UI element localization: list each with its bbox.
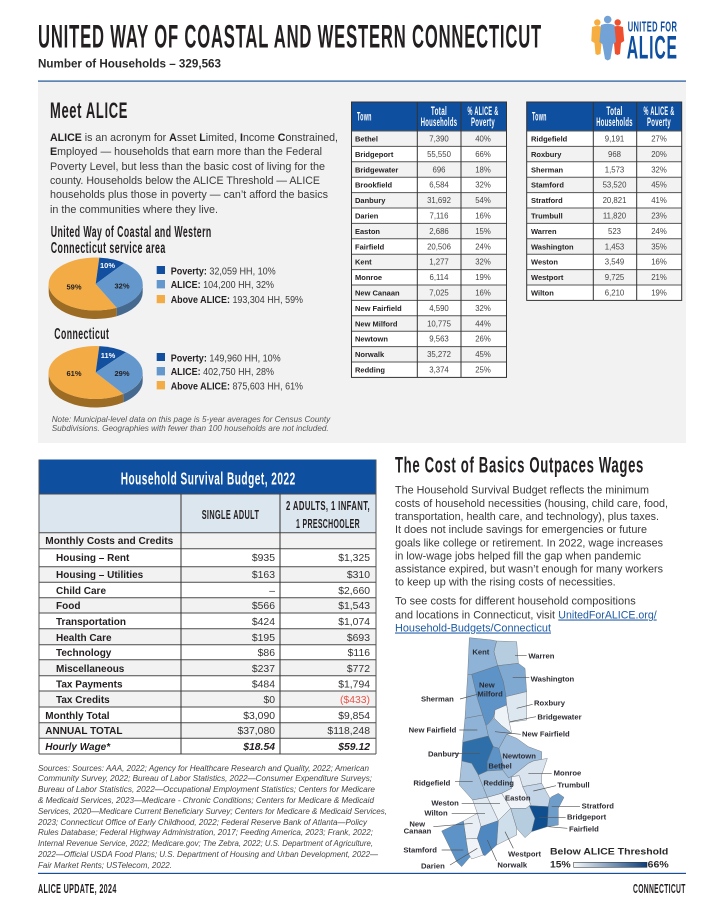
- table: towns R to W: 41%: [651, 196, 667, 205]
- table: towns R to W: Ridgefield: [531, 134, 568, 144]
- pie chart: service area: 10%: [100, 261, 115, 270]
- map legend: Below ALICE Threshold: Below ALICE Threshold: [550, 847, 669, 857]
- town labels: Roxbury: [534, 699, 566, 708]
- budget title bar: Household Survival Budget, 2022: [121, 468, 296, 488]
- text block: link to budgets: To see costs for different household compositions: [395, 596, 636, 608]
- legend: Connecticut: Poverty: 149,960 HH, 10%: [171, 354, 281, 365]
- table: towns R to W: Trumbull: [531, 212, 563, 220]
- table: Household Survival Budget: Tax Payments: [56, 680, 123, 690]
- text block: Household Survival Budget description: in low-wage jobs helped fill the gap when pandemic: [395, 550, 642, 562]
- table: towns A to R: Danbury: [355, 196, 386, 205]
- table: towns A to R: 19%: [475, 273, 491, 282]
- table header: [527, 102, 682, 131]
- town labels: Norwalk: [497, 861, 528, 870]
- table: towns A to R: Bridgeport: [355, 150, 394, 159]
- table: towns R to W: Wilton: [531, 288, 554, 298]
- table: Household Survival Budget: $1,074: [338, 617, 370, 628]
- table: towns A to R: Darien: [355, 212, 379, 220]
- town labels: Weston: [431, 798, 459, 807]
- logo: United for ALICE: [591, 16, 678, 65]
- pie chart: Connecticut: 11%: [101, 351, 116, 360]
- text block: Household Survival Budget description: assistance expired, but wasn’t enough for many workers: [395, 564, 663, 576]
- leader lines: [433, 656, 580, 865]
- table: towns R to W: 45%: [651, 181, 667, 190]
- table: towns R to W: 9,191: [605, 134, 624, 144]
- table: towns A to R: 1,277: [429, 258, 449, 267]
- table: towns R to W: 11,820: [603, 212, 627, 220]
- logo: United for ALICE: UNITED FOR: [628, 20, 677, 36]
- sources: Fair Market Rents; USTelecom, 2022.: [38, 860, 172, 870]
- table: Household Survival Budget: –: [269, 586, 275, 597]
- table: towns A to R: 4,590: [429, 304, 449, 313]
- text block: link to budgets: [395, 596, 657, 634]
- table: Household Survival Budget: Housing – Rent: [56, 553, 130, 564]
- pie chart: service area: 32%: [114, 282, 130, 290]
- legend: Connecticut: Above ALICE: 875,603 HH, 61%: [171, 382, 303, 392]
- note: Subdivisions. Geographies with fewer than 100 households are not included.: [52, 424, 329, 433]
- table: Household Survival Budget: $3,090: [243, 711, 275, 722]
- table: towns A to R: 40%: [475, 134, 491, 144]
- town labels: Kent: [472, 647, 490, 656]
- map: towns shaded by share below ALICE Threshold: [403, 638, 669, 870]
- table: towns A to R: 9,563: [429, 335, 449, 344]
- town labels: Washington: [531, 675, 575, 684]
- table: Household Survival Budget: $9,854: [338, 711, 370, 722]
- table: towns A to R: 18%: [475, 165, 491, 174]
- table: Household Survival Budget: $935: [252, 553, 275, 564]
- pie chart: Connecticut: [49, 346, 143, 407]
- town labels: Wilton: [424, 808, 448, 817]
- table: towns A to R: 44%: [475, 319, 491, 328]
- table: towns A to R: 7,116: [430, 212, 448, 220]
- table: Household Survival Budget: $693: [347, 633, 370, 644]
- text block: ALICE definition: ALICE is an acronym for Asset Limited, Income Constrained,: [50, 132, 338, 144]
- table: towns A to R: 10,775: [427, 319, 452, 328]
- table: Household Survival Budget: $1,794: [338, 680, 370, 690]
- note: [52, 415, 331, 433]
- table: Household Survival Budget: ANNUAL TOTAL: [45, 726, 123, 737]
- text block: link to budgets: and locations in Connecticut, visit: [395, 610, 555, 622]
- town labels: Fairfield: [569, 824, 599, 833]
- note: Note: Municipal-level data on this page is 5-year averages for Census County: [52, 415, 331, 424]
- panel: Meet ALICE background: [38, 80, 686, 443]
- town labels: New Fairfield: [522, 729, 570, 738]
- table: towns A to R: 55,550: [427, 150, 452, 159]
- town labels: Westport: [508, 849, 541, 858]
- table: towns R to W: 20,821: [603, 196, 626, 205]
- town labels: Danbury: [428, 750, 460, 759]
- table: towns R to W: 1,453: [605, 242, 624, 251]
- table header: Total: [606, 104, 623, 118]
- town shapes: [442, 638, 564, 867]
- legend: Connecticut: [157, 353, 303, 392]
- table: towns A to R: Norwalk: [355, 350, 385, 359]
- table: Household Survival Budget: $566: [252, 601, 275, 612]
- map legend: Below ALICE Threshold: 66%: [648, 860, 669, 870]
- budget column headers: SINGLE ADULT: [202, 507, 259, 522]
- table header: Poverty: [647, 115, 671, 129]
- table: towns A to R: New Canaan: [355, 288, 400, 298]
- table: towns A to R: 6,584: [429, 181, 449, 190]
- town labels: Stamford: [403, 845, 437, 854]
- table: towns R to W: Stratford: [531, 196, 563, 205]
- table: Household Survival Budget: Child Care: [56, 586, 106, 597]
- table: towns A to R: 31,692: [427, 196, 451, 205]
- table: towns A to R: [352, 102, 506, 377]
- footer: ALICE Update: ALICE UPDATE, 2024: [38, 881, 117, 896]
- table: towns R to W: 20%: [651, 150, 667, 159]
- table: Household Survival Budget: Monthly Costs and Credits: [45, 536, 174, 547]
- sources: Bureau of Labor Statistics, 2022—Occupational Employment Statistics; Centers for Medicare: [38, 784, 375, 794]
- table: Household Survival Budget: $163: [252, 570, 275, 581]
- text block: Household Survival Budget description: [395, 484, 668, 588]
- text block: ALICE definition: [50, 132, 338, 216]
- subtitle: number of households: Number of Households – 329,563: [38, 58, 221, 70]
- table: towns R to W: Weston: [531, 258, 558, 267]
- table: Household Survival Budget: $116: [348, 648, 370, 659]
- sources: Internal Revenue Service, 2022; Medicare.gov; The Zebra, 2022; U.S. Department of Agriculture,: [38, 838, 373, 848]
- table: towns R to W: 24%: [651, 227, 667, 236]
- table header: Households: [421, 115, 457, 129]
- table: Household Survival Budget: Miscellaneous: [56, 664, 125, 675]
- table: Household Survival Budget: Tax Credits: [56, 695, 110, 706]
- table: towns R to W: 19%: [651, 288, 667, 298]
- text block: link to budgets: Household-Budgets/Connecticut: [395, 622, 551, 634]
- table: towns R to W: [527, 102, 682, 300]
- table: Household Survival Budget: $0: [263, 695, 275, 706]
- table: Household Survival Budget: [39, 460, 376, 754]
- table: towns A to R: Newtown: [355, 335, 388, 344]
- table: towns A to R: New Milford: [355, 319, 398, 328]
- text block: Household Survival Budget description: The Household Survival Budget reflects the minimum: [395, 484, 649, 496]
- table: towns R to W: 9,725: [605, 273, 625, 282]
- text block: link to budgets: UnitedForALICE.org/: [558, 610, 657, 622]
- table: towns A to R: 25%: [475, 366, 491, 374]
- budget column headers: 2 ADULTS, 1 INFANT,: [286, 498, 370, 513]
- table: Household Survival Budget: Housing – Utilities: [56, 570, 144, 581]
- table: towns A to R: 2,686: [429, 227, 449, 236]
- town labels: Ridgefield: [413, 778, 451, 787]
- table: towns R to W: 6,210: [605, 288, 625, 298]
- budget column headers: 1 PRESCHOOLER: [296, 516, 360, 531]
- table: towns A to R: 16%: [475, 212, 491, 220]
- table: towns R to W: 32%: [651, 165, 667, 174]
- table: Household Survival Budget: $37,080: [237, 726, 275, 737]
- legend: service area: Poverty: 32,059 HH, 10%: [171, 266, 276, 277]
- table: towns A to R: 45%: [475, 350, 491, 359]
- map legend: Below ALICE Threshold: [550, 847, 669, 870]
- town labels: Darien: [421, 861, 445, 870]
- table: towns R to W: 21%: [651, 273, 667, 282]
- table: towns R to W: Roxbury: [531, 150, 562, 159]
- table header: Poverty: [471, 115, 495, 129]
- table: Household Survival Budget: ($433): [340, 695, 370, 706]
- table: towns A to R: 24%: [475, 242, 491, 251]
- table header: Town: [357, 110, 372, 124]
- table: towns R to W: 35%: [651, 242, 667, 251]
- table: towns R to W: Sherman: [531, 165, 564, 174]
- sources: Community Survey, 2022; Bureau of Labor Statistics, 2022—Consumer Expenditure Surveys;: [38, 773, 373, 783]
- heading: service area: [51, 224, 212, 257]
- text block: Household Survival Budget description: to keep up with the rising costs of necessities.: [395, 576, 616, 588]
- legend: service area: Above ALICE: 193,304 HH, 59%: [171, 295, 303, 306]
- table: towns R to W: 3,549: [605, 258, 624, 267]
- town labels: Warren: [528, 651, 555, 660]
- table: towns R to W: 23%: [651, 212, 667, 220]
- town labels: New: [409, 820, 425, 829]
- heading: service area: Connecticut service area: [51, 240, 166, 257]
- table: Household Survival Budget: $86: [258, 648, 275, 659]
- sources: Rules Database; Federal Highway Administration, 2017; Feeding America, 2023; Frank, 2022;: [38, 827, 374, 837]
- table: towns R to W: 27%: [651, 134, 667, 144]
- sources: [37, 763, 387, 870]
- table: towns A to R: Redding: [355, 366, 385, 374]
- text block: Household Survival Budget description: goals like college or retirement. In 2022, wage increases: [395, 538, 663, 550]
- town labels: Stratford: [582, 801, 614, 810]
- table: towns A to R: 26%: [475, 335, 491, 344]
- table: towns A to R: 20,506: [427, 242, 451, 251]
- table: Household Survival Budget: $424: [252, 617, 275, 628]
- text block: ALICE definition: in the communities where they live.: [50, 204, 218, 216]
- table: Household Survival Budget: $484: [252, 680, 275, 690]
- table: Household Survival Budget: $195: [252, 633, 275, 644]
- table: Household Survival Budget: $237: [252, 664, 275, 675]
- pie chart: Connecticut: 29%: [114, 369, 130, 378]
- town labels: Easton: [505, 793, 531, 802]
- town labels: Bridgewater: [537, 713, 582, 722]
- town labels: Canaan: [404, 826, 432, 835]
- text block: ALICE definition: households plus those in poverty — can’t afford the basics: [50, 189, 328, 201]
- town labels: Bethel: [488, 761, 512, 770]
- table: towns A to R: 3,374: [429, 366, 449, 374]
- legend: service area: [157, 266, 303, 306]
- sources: 2022—Official USDA Food Plans; U.S. Department of Housing and Urban Development, 2022—: [37, 849, 378, 859]
- table header: % ALICE &: [468, 104, 498, 118]
- table header: % ALICE &: [644, 104, 674, 118]
- town labels: Redding: [483, 778, 514, 787]
- table: Household Survival Budget: $1,543: [338, 601, 370, 612]
- town labels: Newtown: [502, 751, 536, 760]
- table: Household Survival Budget: Technology: [56, 648, 112, 659]
- table: towns A to R: 15%: [475, 227, 491, 236]
- legend: service area: ALICE: 104,200 HH, 32%: [171, 280, 274, 291]
- table: towns A to R: Easton: [355, 227, 380, 236]
- table: towns A to R: 6,114: [430, 273, 449, 282]
- footer rule: [38, 873, 686, 874]
- town labels: Trumbull: [557, 780, 590, 789]
- table: Household Survival Budget: Food: [56, 601, 80, 612]
- pie chart: Connecticut: 61%: [66, 369, 82, 378]
- pie chart: service area: [49, 258, 143, 319]
- pie chart: service area: 59%: [66, 282, 82, 292]
- table: towns R to W: 1,573: [605, 165, 624, 174]
- table header: [352, 102, 506, 131]
- table header: Town: [532, 110, 547, 124]
- town labels: Milford: [477, 690, 503, 699]
- table: Household Survival Budget: $1,325: [338, 553, 370, 564]
- table: towns A to R: Brookfield: [355, 181, 393, 190]
- table: Household Survival Budget: $59.12: [337, 742, 370, 753]
- text block: Household Survival Budget description: It does not include savings for emergencies or future: [395, 524, 647, 536]
- heading: service area: United Way of Coastal and Western: [51, 224, 212, 241]
- map legend: Below ALICE Threshold: 15%: [550, 860, 571, 870]
- table: towns R to W: Stamford: [531, 181, 564, 190]
- table: towns A to R: 32%: [475, 258, 491, 267]
- town labels: Bridgeport: [567, 813, 607, 822]
- table: towns A to R: New Fairfield: [355, 304, 402, 313]
- table: towns A to R: 32%: [475, 304, 491, 313]
- table: towns R to W: 16%: [651, 258, 667, 267]
- table: towns R to W: Washington: [531, 242, 574, 251]
- table: Household Survival Budget: $2,660: [338, 586, 370, 597]
- table: Household Survival Budget: Transportation: [56, 617, 126, 628]
- table: towns A to R: Monroe: [355, 273, 382, 282]
- table: towns A to R: Bethel: [355, 134, 378, 144]
- table: towns R to W: 523: [608, 227, 621, 236]
- table: towns R to W: 53,520: [603, 181, 627, 190]
- town labels: New Fairfield: [409, 725, 457, 734]
- table: Household Survival Budget: Hourly Wage*: [45, 742, 111, 753]
- sources: Services, 2020—Medicare Current Beneficiary Survey; Centers for Medicare & Medicaid Services,: [38, 806, 387, 816]
- table: towns A to R: 32%: [475, 181, 491, 190]
- table: Household Survival Budget: $310: [347, 570, 370, 581]
- text block: ALICE definition: Poverty Level, but less than the basic cost of living for the: [50, 161, 325, 173]
- table: Household Survival Budget: Health Care: [56, 633, 112, 644]
- table: towns A to R: 7,390: [429, 134, 449, 144]
- town labels: Monroe: [554, 769, 581, 778]
- table: towns A to R: 66%: [475, 150, 491, 159]
- table: Household Survival Budget: Monthly Total: [45, 711, 110, 722]
- town labels: Sherman: [421, 695, 454, 704]
- table: towns A to R: 35,272: [427, 350, 451, 359]
- table: towns A to R: 696: [432, 165, 446, 174]
- table: towns A to R: 16%: [475, 288, 491, 298]
- table: towns R to W: Warren: [531, 227, 557, 236]
- sources: 2023; Connecticut Office of Early Childhood, 2022; Federal Reserve Bank of Atlanta—Policy: [37, 817, 368, 827]
- table: towns A to R: Bridgewater: [355, 165, 398, 174]
- table: towns R to W: Westport: [531, 273, 564, 282]
- table: towns A to R: Fairfield: [355, 242, 385, 251]
- town labels: New: [479, 681, 495, 690]
- table: towns A to R: Kent: [355, 258, 372, 267]
- text block: Household Survival Budget description: costs of household necessities (housing, child care, food,: [395, 498, 668, 510]
- table: Household Survival Budget: $772: [347, 664, 370, 675]
- budget title bar: [39, 460, 376, 494]
- table: Household Survival Budget: $18.54: [242, 742, 275, 753]
- sources: Sources: Sources: AAA, 2022; Agency for Healthcare Research and Quality, 2022; American: [38, 763, 369, 773]
- table: towns A to R: 54%: [475, 196, 491, 205]
- table: towns A to R: 7,025: [429, 288, 449, 298]
- table: Household Survival Budget: $118,248: [327, 726, 370, 737]
- table: towns R to W: 968: [608, 150, 621, 159]
- budget column headers: [39, 494, 376, 533]
- heading: Connecticut: Connecticut: [54, 326, 109, 343]
- sources: & Medicaid Services, 2023—Medicare - Chronic Conditions; Centers for Medicare & Medicaid: [38, 795, 374, 805]
- heading: Meet ALICE: Meet ALICE: [50, 98, 128, 123]
- text block: ALICE definition: county. Households below the ALICE Threshold — ALICE: [50, 175, 320, 187]
- legend: Connecticut: ALICE: 402,750 HH, 28%: [171, 367, 274, 378]
- text block: Household Survival Budget description: transportation, health care, and technology), plus taxes.: [395, 511, 659, 523]
- table header: Households: [596, 115, 633, 129]
- text block: ALICE definition: Employed — households that earn more than the Federal: [50, 146, 322, 158]
- table header: Total: [431, 104, 447, 118]
- town labels: [403, 647, 614, 870]
